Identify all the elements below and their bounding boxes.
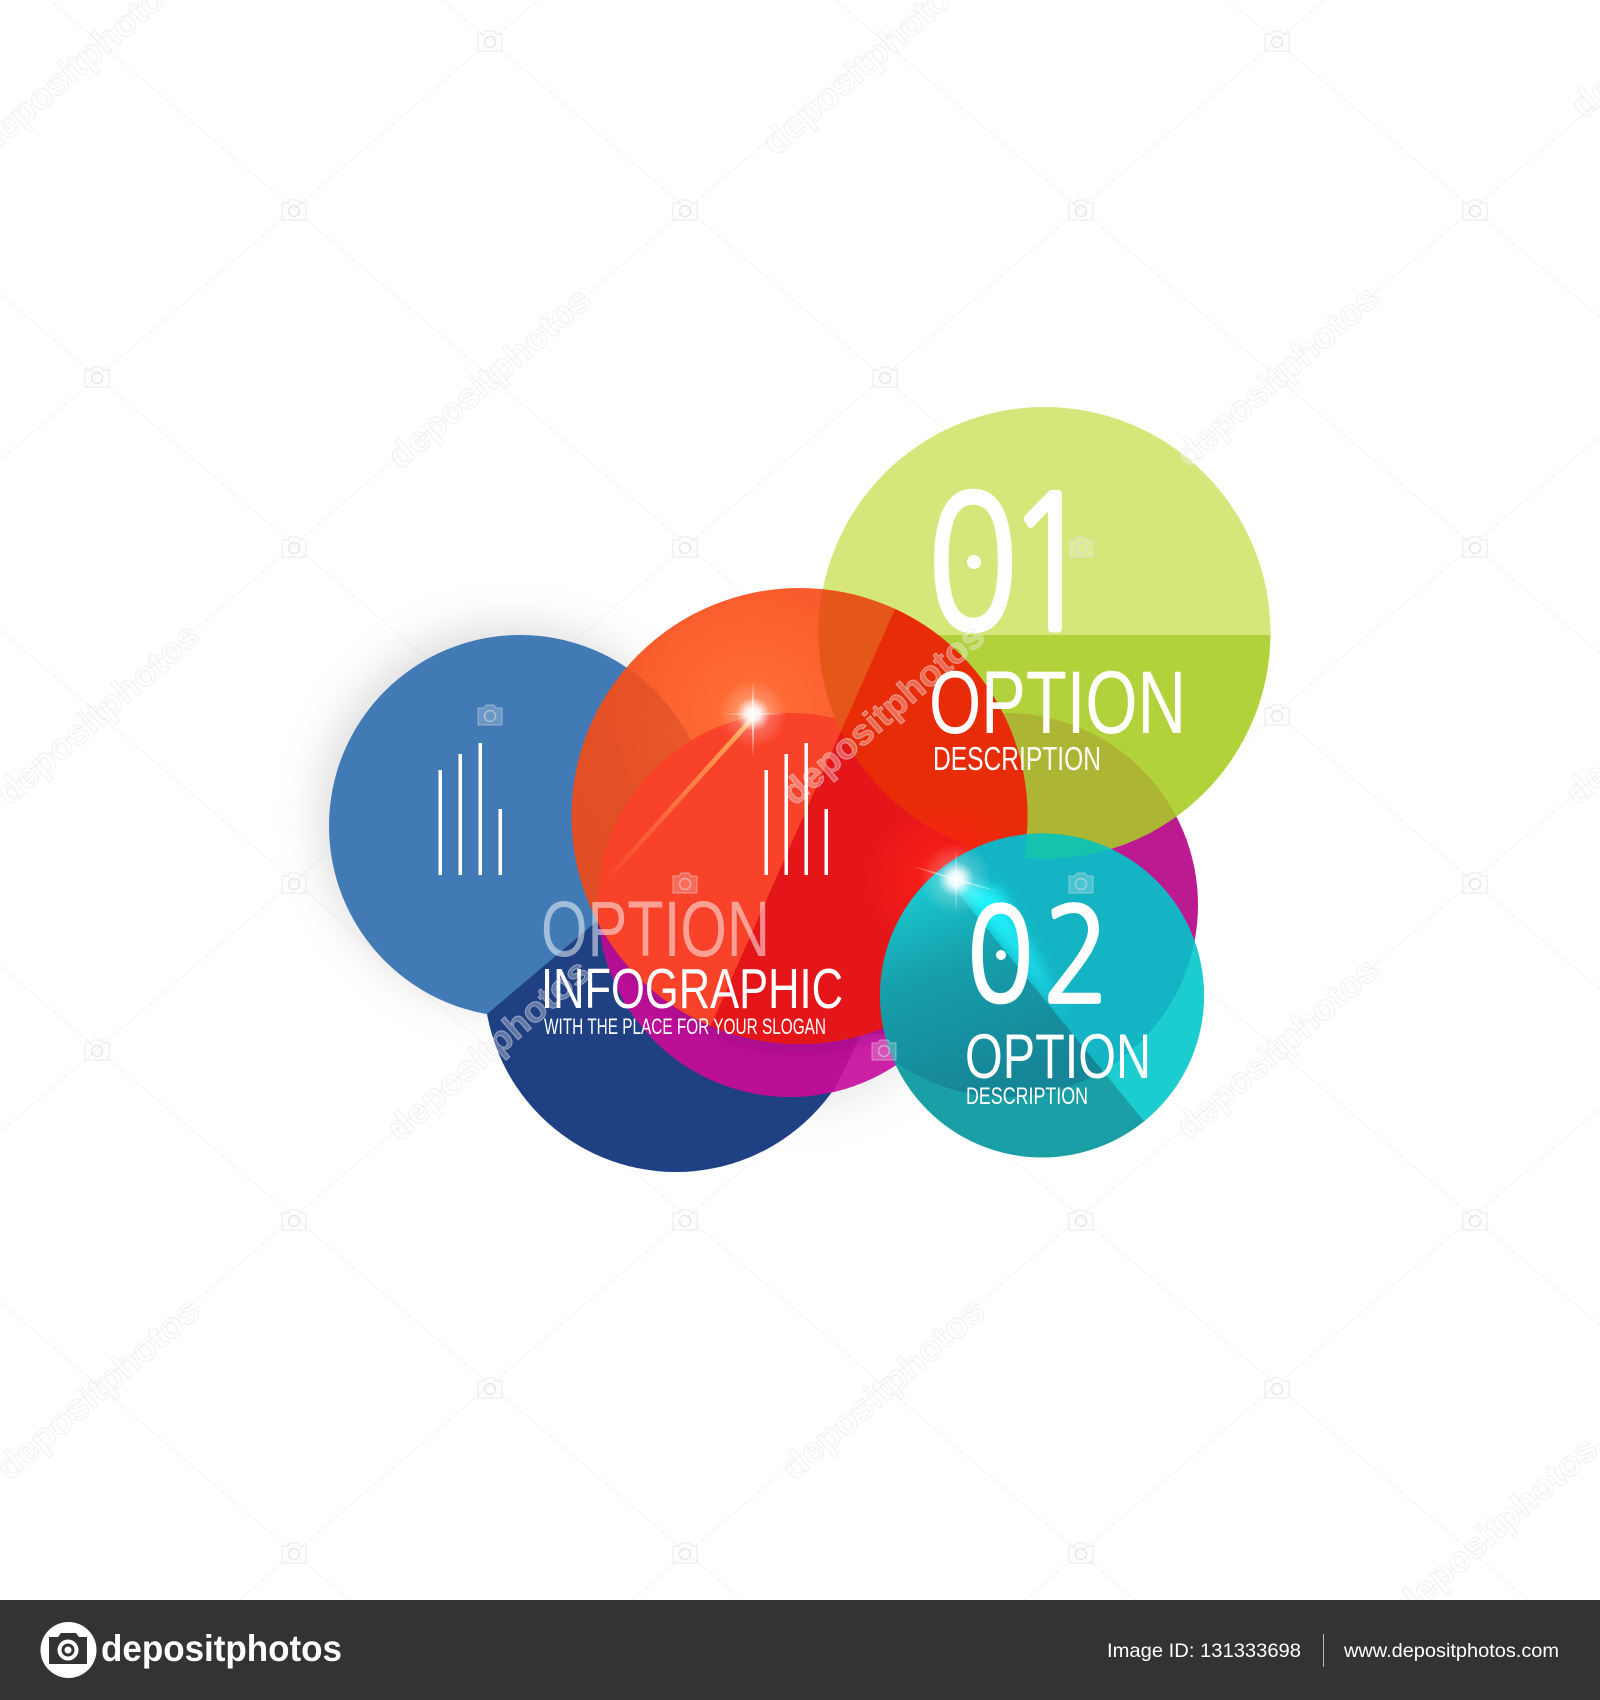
logo wordmark: depositphotos: [101, 1628, 342, 1669]
green circle: [822, 407, 1270, 849]
streak: cyan light: [957, 878, 1058, 1006]
number 01: 01: [926, 471, 1096, 657]
watermark text: depositphotos: [773, 614, 992, 813]
blue circle: [329, 635, 711, 1017]
icon: depositphotos camera logo: [40, 1622, 96, 1678]
option label faded: OPTION: [541, 884, 770, 973]
option label green: OPTION: [929, 652, 1186, 752]
watermark text: depositphotos: [1167, 276, 1386, 475]
watermark text: depositphotos: [379, 278, 598, 477]
number 02: 02: [966, 890, 1110, 1021]
light flare 1: [719, 680, 787, 758]
red circle: [572, 588, 1028, 1044]
magenta circle left: [599, 924, 896, 1097]
description green: DESCRIPTION: [933, 740, 1101, 777]
divider: [1323, 1634, 1324, 1667]
icon: bars in blue circle: [438, 743, 502, 875]
description teal: DESCRIPTION: [966, 1083, 1088, 1110]
soft shadow behind circles: [318, 624, 976, 1111]
image id: Image ID: 131333698: [1107, 1640, 1301, 1662]
infographic title: INFOGRAPHIC: [541, 957, 843, 1021]
website url: www.depositphotos.com: [1343, 1640, 1559, 1662]
watermark text: depositphotos: [1167, 948, 1386, 1147]
slogan: WITH THE PLACE FOR YOUR SLOGAN: [544, 1014, 826, 1039]
option label teal: OPTION: [965, 1022, 1151, 1092]
watermark camera icons: [85, 31, 1487, 1563]
watermark text: depositphotos: [378, 950, 597, 1149]
teal circle: [875, 830, 1210, 1160]
olive overlap: [1003, 713, 1176, 849]
footer bar: [0, 1600, 1600, 1700]
watermark text: depositphotos: [773, 1289, 992, 1488]
navy circle: [487, 921, 832, 1172]
light flare 2: [912, 843, 1000, 915]
magenta circle right: [814, 713, 1198, 1097]
streak: orange light: [600, 714, 756, 886]
icon: bars in red circle: [764, 743, 828, 875]
watermark text: depositphotos: [1386, 1427, 1600, 1626]
